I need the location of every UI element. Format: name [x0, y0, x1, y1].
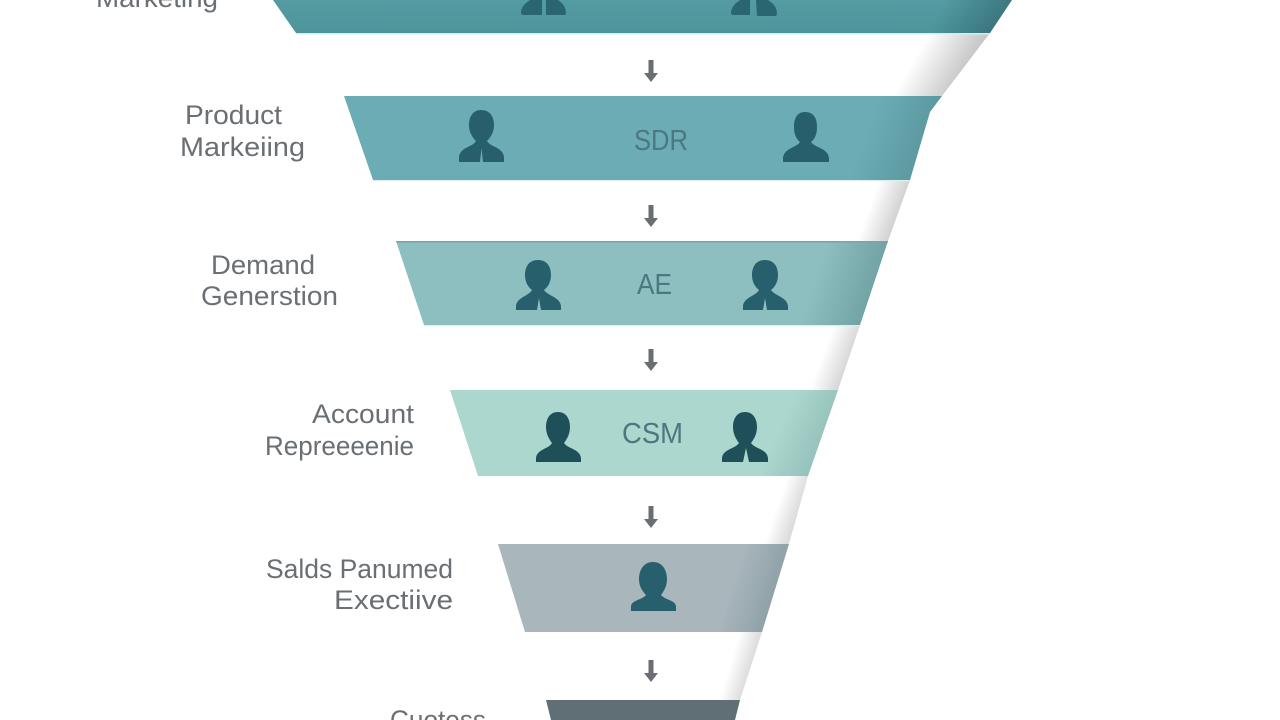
label: Sales Executive: Exectiive — [334, 585, 453, 615]
funnel band 2: Product Marketing — [344, 96, 942, 181]
label: Product Marketing — [180, 100, 305, 162]
icon: person left, band 4 — [536, 412, 581, 462]
label: Sales Executive — [266, 554, 453, 615]
arrow 3 — [644, 349, 658, 371]
label: Account Representative: Repreeeenie — [265, 431, 414, 461]
label: Demand Generation — [201, 250, 338, 311]
icon: person right, band 1 — [731, 0, 777, 16]
label: Product Marketing: Product — [185, 100, 283, 130]
funnel band 4: Account Representative — [450, 390, 838, 476]
icon: person right, band 4 — [722, 412, 768, 462]
icon: person, band 5 — [631, 562, 676, 611]
label: Account Representative — [265, 399, 415, 461]
label: Demand Generation: Generstion — [201, 281, 338, 311]
text: AE: AE — [637, 269, 672, 301]
arrow 2 — [644, 205, 658, 227]
text: SDR: SDR — [634, 125, 688, 157]
icon: person left, band 3 — [516, 260, 561, 310]
icon: person left, band 1 — [521, 0, 566, 15]
funnel band 6: Customer Success (cropped) — [546, 700, 740, 720]
funnel band 5: Sales Executive — [498, 544, 789, 632]
gap shadow: right fold of the funnel — [705, 33, 990, 700]
label: Demand Generation: Demand — [211, 250, 315, 280]
text: CSM: CSM — [622, 418, 683, 450]
label: Sales Executive: Salds Panumed — [266, 554, 453, 584]
arrow 4 — [644, 506, 658, 528]
label: Product Marketing: Markeiing — [180, 132, 305, 162]
icon: person right, band 3 — [743, 260, 788, 310]
funnel band 3: Demand Generation — [396, 241, 888, 326]
arrow 1 — [644, 60, 658, 82]
icon: person right, band 2 — [783, 112, 829, 162]
label: Account Representative: Account — [312, 399, 415, 429]
arrow 5 — [644, 660, 658, 682]
funnel band 1: Marketing — [273, 0, 1012, 34]
icon: person left, band 2 — [459, 110, 504, 162]
